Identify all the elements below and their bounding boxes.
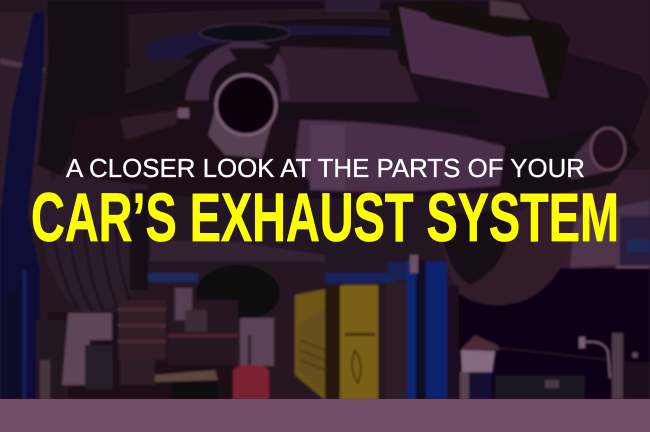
lift crossbars [148,273,198,282]
right garage wall [560,170,650,270]
license plate [400,8,548,97]
undercarriage [140,195,455,321]
left wall [0,0,50,216]
dark band above muffler [275,102,480,122]
shop background [36,288,238,400]
left tire [38,175,148,312]
muffler [295,120,640,200]
right tailpipe [570,128,625,180]
plate housing [388,0,570,100]
dark right lower background [455,268,650,400]
lift post left [0,11,45,400]
title line 1: A CLOSER LOOK AT THE PARTS OF YOUR [66,155,585,183]
dark column [38,0,125,175]
yellow tool cabinet [295,285,378,400]
bumper panel [280,46,420,105]
lift post right [386,255,459,400]
shroud around left tailpipe [185,41,290,100]
car body underside [110,0,650,200]
white wall panel right [570,216,620,268]
white cylinder and red tank [233,318,274,400]
left tailpipe [208,75,276,158]
shop items right [460,333,650,400]
bottom band [0,399,650,432]
lower chassis [70,97,300,200]
right tire [438,190,575,305]
